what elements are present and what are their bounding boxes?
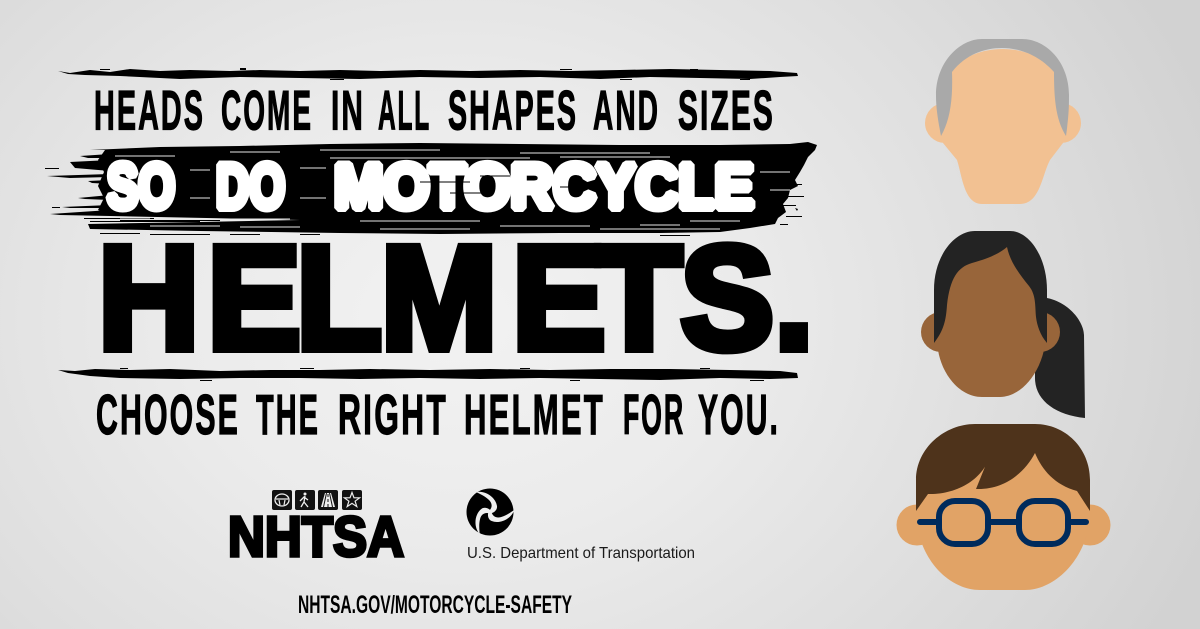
heading: heads come in all shapes and sizes: IN <box>331 78 365 142</box>
icon: woman's head with dark ponytail <box>921 231 1085 418</box>
heading: heads come in all shapes and sizes: AND <box>593 78 660 142</box>
logo: NHTSA <box>228 490 404 569</box>
tagline: choose the right helmet for you: YOU. <box>698 383 780 447</box>
glasses <box>920 501 1086 544</box>
tagline: choose the right helmet for you: THE <box>256 383 320 447</box>
icon: boy's head with brown hair and glasses <box>896 424 1110 590</box>
website url: NHTSA.GOV/MOTORCYCLE-SAFETY <box>298 591 572 619</box>
tagline: choose the right helmet for you <box>96 383 780 447</box>
tagline: choose the right helmet for you: FOR <box>623 383 685 447</box>
wordmark: NHTSA: NHTSA <box>228 505 404 569</box>
heading: so do motorcycle: SO <box>107 152 175 222</box>
icon: road <box>318 490 338 510</box>
heading: heads come in all shapes and sizes: SHAPES <box>448 78 578 142</box>
heading: heads come in all shapes and sizes: SIZES <box>678 78 775 142</box>
heading: so do motorcycle: MOTORCYCLE <box>334 152 754 222</box>
icon: star <box>342 490 362 510</box>
heading: heads come in all shapes and sizes <box>94 78 775 142</box>
tagline: choose the right helmet for you: CHOOSE <box>96 383 240 447</box>
heading: helmets: HELMETS. <box>98 216 813 380</box>
heading: so do motorcycle <box>107 152 754 222</box>
heading: heads come in all shapes and sizes: COME <box>221 78 313 142</box>
icon: DOT triskelion <box>466 488 515 536</box>
wordmark: department name: U.S. Department of Transportation <box>467 545 695 562</box>
icon: steering wheel <box>272 490 292 510</box>
heading: so do motorcycle: DO <box>216 152 285 222</box>
tagline: choose the right helmet for you: RIGHT <box>338 383 448 447</box>
heading: heads come in all shapes and sizes: ALL <box>378 78 431 142</box>
brush stroke: large black banner <box>45 142 817 236</box>
icon: older man's head with grey hair <box>925 39 1081 204</box>
icon: pedestrian <box>295 490 315 510</box>
logo: U.S. Department of Transportation <box>466 488 695 562</box>
heading: heads come in all shapes and sizes: HEADS <box>94 78 205 142</box>
brush stroke: lower rule <box>58 368 798 381</box>
brush stroke: top rule <box>58 68 798 80</box>
tagline: choose the right helmet for you: HELMET <box>464 383 605 447</box>
